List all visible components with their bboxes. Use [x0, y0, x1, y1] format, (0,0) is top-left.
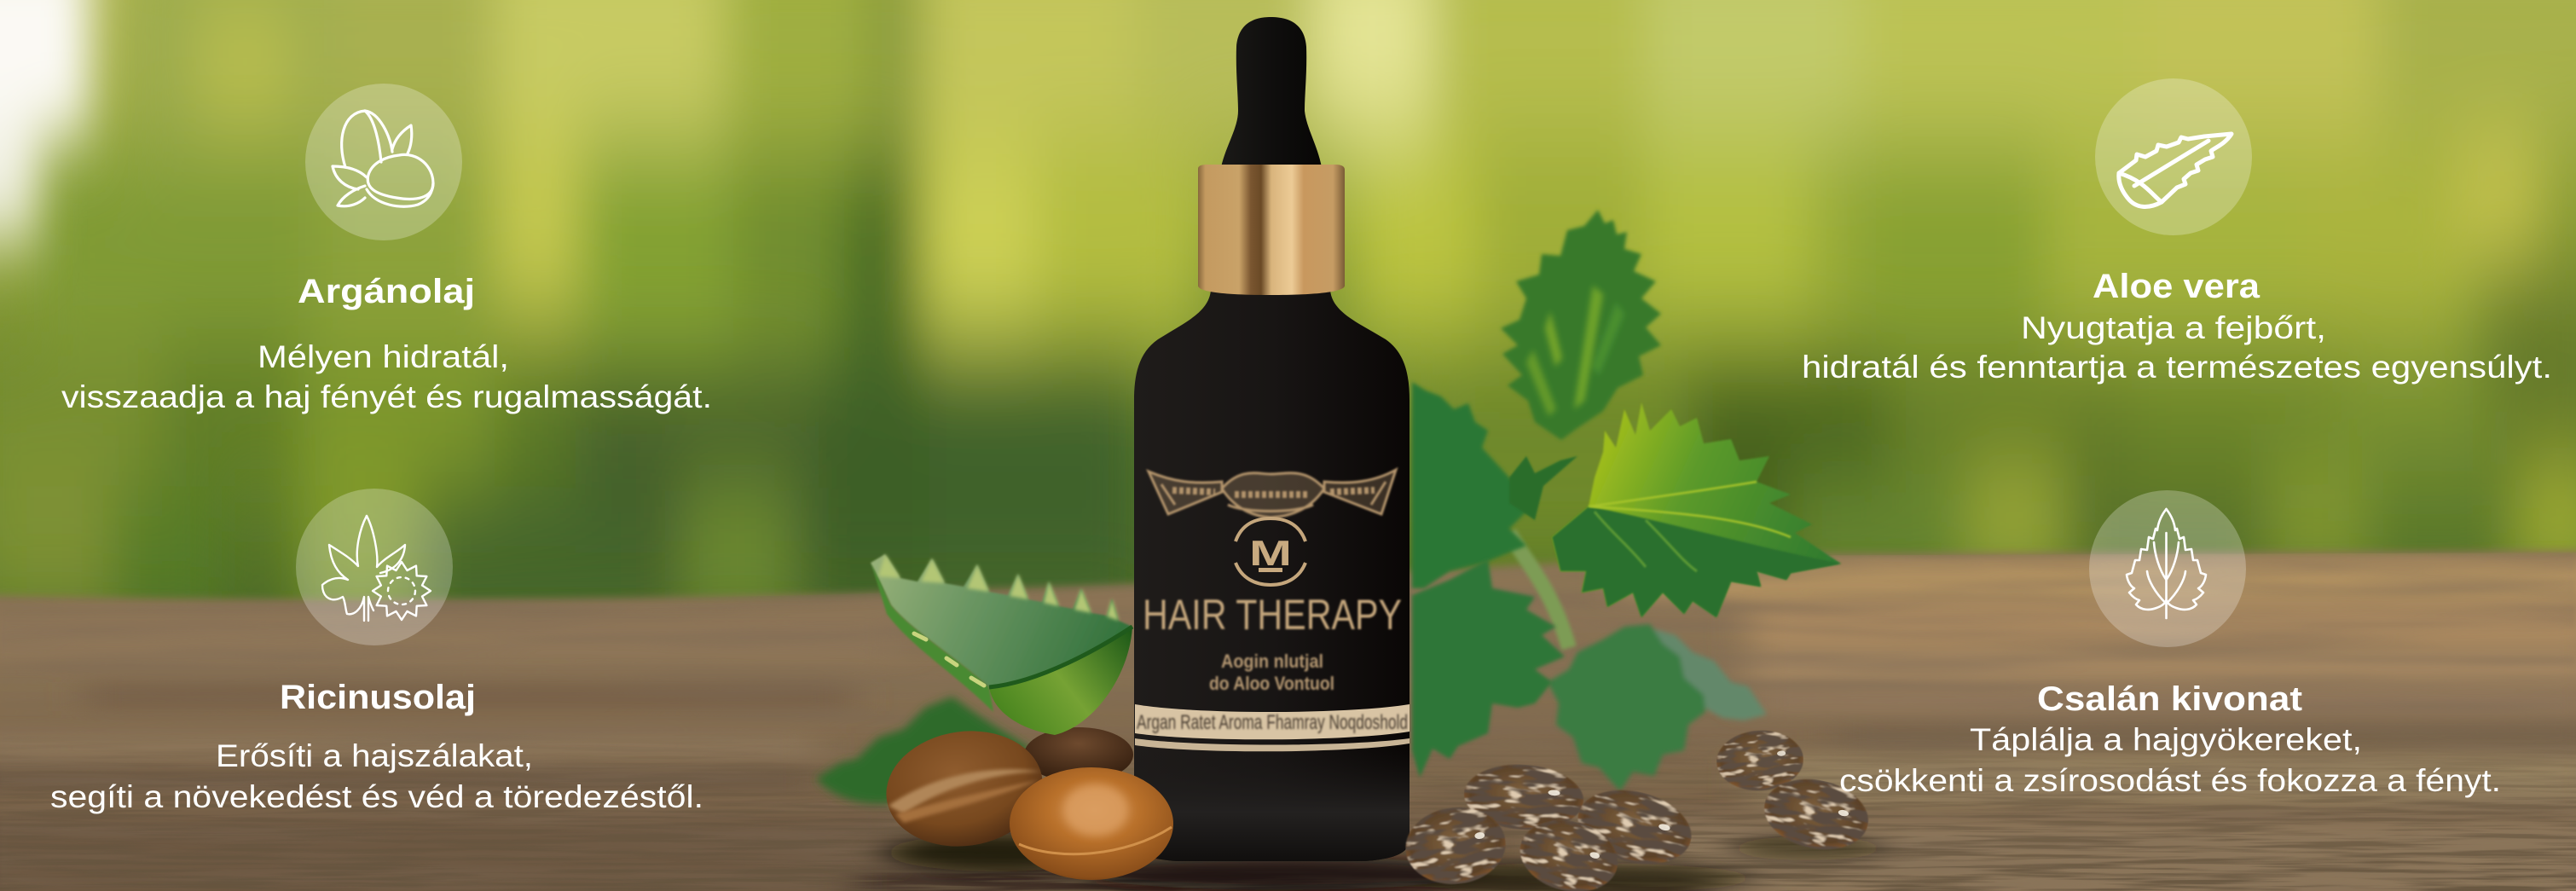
table shadow under product	[887, 834, 1884, 891]
icon: aloe leaf	[2119, 134, 2232, 206]
logo mark: M	[1249, 533, 1292, 573]
description: hidratál és fenntartja a természetes egyensúlyt.	[1802, 350, 2552, 385]
heading: Argánolaj	[298, 273, 475, 310]
left argan nut	[879, 721, 1050, 856]
seed 2	[1462, 761, 1586, 834]
icon: castor leaf and seed	[322, 516, 431, 621]
background: blurred green foliage	[0, 0, 2576, 622]
heading: Aloe vera	[2093, 268, 2261, 305]
nettle main leaf	[1552, 402, 1841, 617]
seed 1	[1402, 802, 1509, 889]
product subtitle: Aogin nlutjal	[1221, 651, 1323, 672]
dropper bottle	[1134, 17, 1410, 861]
bottle base sheen	[1135, 750, 1410, 861]
nettle lower left leaf	[1412, 559, 1565, 778]
icon: nettle leaf	[2127, 509, 2206, 618]
heading: Csalán kivonat	[2037, 680, 2302, 718]
description	[61, 339, 712, 414]
product subtitle: do Aloo Vontuol	[1209, 673, 1334, 694]
aloe rim	[871, 564, 993, 712]
aloe spikes	[878, 554, 1119, 621]
icon circle	[2089, 490, 2246, 647]
logo mark	[1236, 518, 1305, 585]
description: Mélyen hidratál,	[258, 339, 509, 374]
nettle main leaf shaded half	[1552, 506, 1841, 617]
seed 4	[1513, 810, 1625, 891]
description: Nyugtatja a fejbőrt,	[2021, 310, 2326, 345]
back argan nut	[1024, 727, 1133, 782]
back nettle leaves (blurred)	[1548, 624, 1767, 791]
nettle top leaf	[1501, 210, 1661, 440]
icon circle	[296, 489, 453, 645]
blurred green leaf behind aloe	[816, 697, 1032, 804]
nettle left upper leaf	[1412, 382, 1535, 588]
white sky gap	[0, 0, 90, 239]
seed 5	[1715, 728, 1805, 793]
cream label band	[1135, 704, 1410, 751]
panel: Argánolaj	[61, 84, 712, 414]
icon circle	[305, 84, 462, 240]
icon circle	[2095, 78, 2252, 235]
description: csökkenti a zsírosodást és fokozza a fényt.	[1839, 763, 2501, 798]
panel: Aloe vera	[1802, 78, 2552, 385]
heading: Ricinusolaj	[280, 679, 476, 716]
description: segíti a növekedést és véd a töredezéstől.	[50, 779, 703, 814]
panel: Csalán kivonat	[1839, 490, 2501, 798]
product name: HAIR THERAPY	[1143, 591, 1402, 639]
bottle rubber bulb	[1221, 17, 1322, 167]
seed 6	[1757, 770, 1875, 859]
cream label band: Argan Ratet Aroma Fhamray Noqdoshold	[1137, 711, 1408, 734]
castor seeds	[1402, 728, 1875, 891]
icon: argan	[333, 111, 433, 206]
aloe cut face	[989, 627, 1132, 735]
description	[1802, 310, 2552, 385]
front argan nut	[1010, 767, 1173, 880]
wooden table	[0, 546, 2576, 891]
bottle glass body	[1134, 290, 1410, 861]
aloe vera leaf	[871, 554, 1132, 735]
product subtitle	[1209, 651, 1334, 694]
nettle small centre leaflets	[1509, 456, 1577, 520]
nettle plant	[1412, 210, 1841, 778]
gold collar	[1198, 165, 1345, 295]
argan nuts	[879, 721, 1173, 880]
panel: Ricinusolaj	[50, 489, 703, 814]
nettle stem	[1509, 533, 1569, 648]
description: Táplálja a hajgyökereket,	[1970, 722, 2362, 757]
label ornament	[1149, 470, 1396, 518]
aloe skin	[871, 554, 1132, 687]
description: Erősíti a hajszálakat,	[216, 738, 533, 773]
seed 3	[1570, 779, 1699, 875]
description: visszaadja a haj fényét és rugalmasságát.	[61, 379, 712, 414]
description	[50, 738, 703, 814]
description	[1839, 722, 2501, 798]
